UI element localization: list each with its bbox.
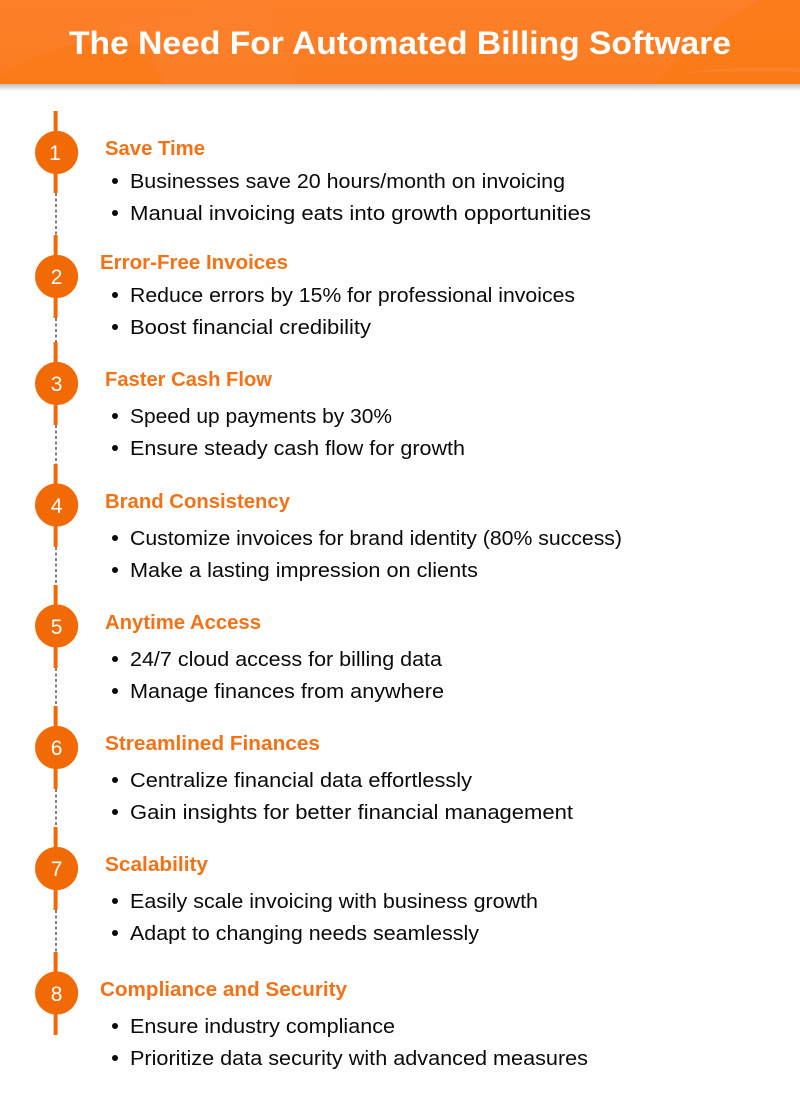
step 6: Streamlined Finances: Centralize financial data effortlessly [130,770,472,792]
step 5: Anytime Access: Manage finances from anywhere [130,681,444,703]
step 4: Brand Consistency: Customize invoices for brand identity (80% success) [130,528,622,550]
step 7: Scalability: Adapt to changing needs seamlessly [130,923,479,945]
step 2: Error-Free Invoices: 2 [51,266,62,289]
header banner [0,0,800,91]
step 1: Save Time: Manual invoicing eats into growth opportunities [130,203,591,225]
step 7: Scalability: Easily scale invoicing with business growth [130,891,538,913]
step 5: Anytime Access: Anytime Access [105,612,261,634]
step 6: Streamlined Finances: 6 [51,737,62,760]
step 6: Streamlined Finances: Gain insights for better financial management [130,802,573,824]
step 7: Scalability [35,847,538,945]
step 7: Scalability: Scalability [105,854,209,876]
title: The Need For Automated Billing Software [69,25,731,61]
step 8: Compliance and Security: Compliance and Security [100,979,348,1001]
step 5: Anytime Access [35,604,444,703]
step 6: Streamlined Finances [35,726,573,824]
step 3: Faster Cash Flow: Ensure steady cash flow for growth [130,438,465,460]
step 5: Anytime Access: 5 [51,616,62,639]
step 8: Compliance and Security [35,971,588,1070]
step 8: Compliance and Security: Ensure industry compliance [130,1016,395,1038]
step 1: Save Time: Save Time [105,138,205,160]
step 3: Faster Cash Flow: Speed up payments by 30% [130,406,392,428]
step 3: Faster Cash Flow [35,362,465,460]
step 2: Error-Free Invoices: Error-Free Invoices [100,252,288,274]
step 4: Brand Consistency: Brand Consistency [105,491,291,513]
step 1: Save Time: 1 [49,142,61,165]
step 3: Faster Cash Flow: 3 [51,373,62,396]
step 8: Compliance and Security: Prioritize data security with advanced measures [130,1048,588,1070]
step 2: Error-Free Invoices: Reduce errors by 15% for professional invoices [130,285,575,307]
step 7: Scalability: 7 [51,858,62,881]
timeline connector [54,111,58,1035]
step 4: Brand Consistency: 4 [51,495,63,518]
step 5: Anytime Access: 24/7 cloud access for billing data [130,649,443,671]
step 1: Save Time: Businesses save 20 hours/month on invoicing [130,171,565,193]
step 1: Save Time [35,131,591,225]
step 6: Streamlined Finances: Streamlined Finances [105,733,320,755]
step 3: Faster Cash Flow: Faster Cash Flow [105,369,272,391]
step 8: Compliance and Security: 8 [51,983,62,1006]
step 2: Error-Free Invoices: Boost financial credibility [130,317,371,339]
step 4: Brand Consistency [35,483,622,582]
step 2: Error-Free Invoices [35,252,575,339]
step 4: Brand Consistency: Make a lasting impression on clients [130,560,478,582]
